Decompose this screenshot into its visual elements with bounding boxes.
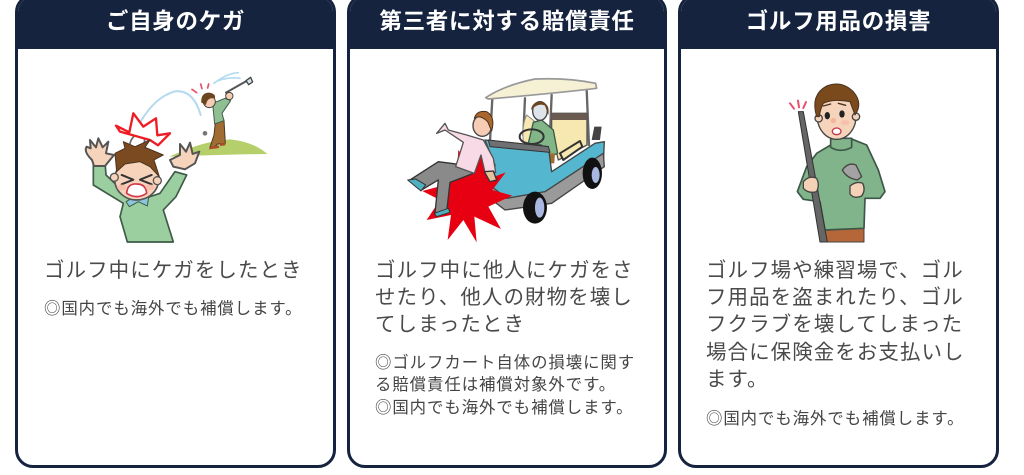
description: equipment damage: ゴルフ場や練習場で、ゴル (706, 259, 964, 282)
panel: ゴルフ用品の損害 (678, 0, 999, 468)
note: liability exclusions: ◎ゴルフカート自体の損壊に関す (375, 354, 635, 372)
panel: ご自身のケガ (15, 0, 336, 468)
heading: ゴルフ用品の損害: ゴルフ用品の損害 (746, 9, 931, 34)
note: liability exclusions (375, 354, 635, 417)
note: coverage area: ◎国内でも海外でも補償します。 (706, 410, 964, 428)
heading: ゴルフ用品の損害 (678, 0, 999, 49)
heading: ご自身のケガ: ご自身のケガ (106, 9, 245, 34)
panel: 第三者に対する賠償責任 (347, 0, 667, 468)
heading: 第三者に対する賠償責任 (347, 0, 667, 49)
description: equipment damage: フ用品を盗まれたり、ゴル (706, 286, 964, 309)
icon: man holding a broken golf club (790, 84, 885, 242)
description: liability: てしまったとき (375, 313, 525, 336)
note: coverage area: ◎国内でも海外でも補償します。 (44, 300, 302, 318)
description: injury: ゴルフ中にケガをしたとき (44, 259, 303, 282)
icon: golfer hits a man with a ball (86, 73, 267, 242)
heading: ご自身のケガ (15, 0, 336, 49)
heading: 第三者に対する賠償責任: 第三者に対する賠償責任 (379, 9, 635, 34)
description: equipment damage: ます。 (706, 368, 769, 391)
description: equipment damage: フクラブを壊してしまった (706, 313, 963, 336)
description: liability: せたり、他人の財物を壊し (375, 286, 633, 309)
description: liability (375, 259, 634, 336)
description: liability: ゴルフ中に他人にケガをさ (375, 259, 634, 282)
note: liability exclusions: ◎国内でも海外でも補償します。 (375, 399, 633, 417)
description: equipment damage: 場合に保険金をお支払いし (706, 341, 965, 364)
note: liability exclusions: る賠償責任は補償対象外です。 (375, 376, 616, 394)
icon: golf cart collides with a man (408, 79, 604, 242)
description: equipment damage (706, 259, 965, 391)
